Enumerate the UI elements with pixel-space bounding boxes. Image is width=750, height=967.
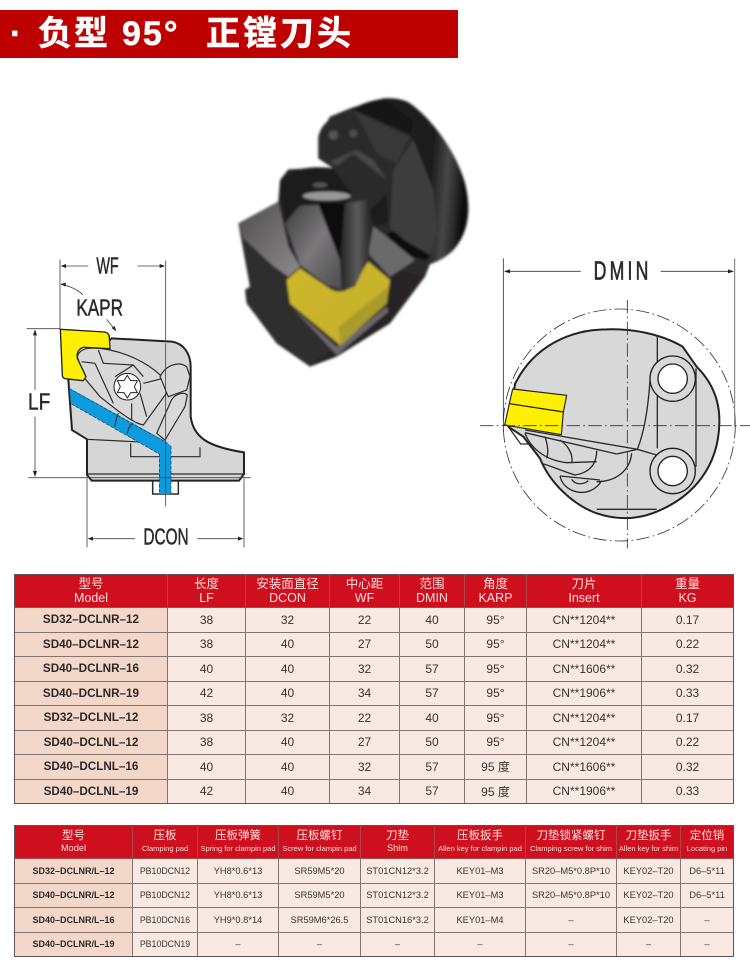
table header: SD40–DCLNL–16 (44, 760, 138, 773)
table header: CN**1906** (553, 686, 615, 700)
yellow insert (505, 389, 567, 435)
block top face (238, 202, 300, 277)
table header: ST01CN12*3.2 (366, 890, 429, 900)
table header: – (704, 915, 710, 925)
cylinder face (318, 108, 430, 277)
table header: PB10DCN12 (140, 866, 190, 876)
table header: – (646, 939, 651, 949)
holder body (68, 338, 244, 481)
table header: 95° (486, 662, 505, 676)
silhouette (238, 99, 468, 367)
table header: 95° (486, 735, 505, 749)
table header: Clamping pad (142, 844, 188, 853)
table header: YH8*0.6*13 (214, 890, 262, 900)
table header: 压板螺钉 (296, 830, 342, 842)
table header: ST01CN12*3.2 (366, 866, 429, 876)
table header: Spring for clampin pad (200, 844, 276, 853)
table header: KEY01–M3 (456, 866, 504, 876)
table header: 34 (358, 686, 371, 700)
product photo: boring head (238, 98, 468, 367)
table header: 0.32 (676, 662, 699, 676)
table header: Insert (568, 591, 600, 605)
table header: 中心距 (346, 577, 383, 591)
table header: 38 (200, 613, 213, 627)
table header: 0.33 (676, 686, 699, 700)
table header: 0.32 (676, 760, 699, 774)
table header: 57 (425, 784, 439, 798)
table header: SR59M5*20 (294, 866, 345, 876)
table header: 型号 (78, 577, 104, 591)
table header: SR59M5*20 (294, 890, 345, 900)
table header: 安装面直径 (256, 577, 319, 591)
table header: KEY02–T20 (623, 866, 674, 876)
table header: 57 (425, 662, 439, 676)
table header: 95° (486, 637, 505, 651)
table header: SD40–DCLNL–12 (44, 736, 138, 749)
title text: 95°: 95° (122, 15, 179, 53)
table header: SR59M6*26.5 (291, 915, 348, 925)
table header: PB10DCN19 (140, 939, 190, 949)
right diagram: front view (480, 256, 750, 548)
label: WF: WF (96, 252, 119, 278)
title text: 负型: 负型 (38, 15, 110, 53)
table header: 27 (358, 735, 371, 749)
table header: 27 (358, 637, 371, 651)
table header: 38 (200, 637, 213, 651)
table header: YH8*0.6*13 (214, 866, 262, 876)
bolt holes (650, 356, 695, 494)
title text: 正镗刀头: 正镗刀头 (206, 15, 354, 53)
table header (15, 575, 733, 803)
table header: KG (678, 591, 697, 605)
table header: 刀垫锁紧螺钉 (536, 830, 606, 842)
table header: PB10DCN16 (140, 915, 190, 925)
table header: KEY02–T20 (623, 915, 674, 925)
title banner (0, 10, 458, 58)
table header: YH9*0.8*14 (214, 915, 262, 925)
table header: 95 度 (481, 760, 510, 774)
table header: DMIN (416, 591, 448, 605)
table header: SR20–M5*0.8P*10 (532, 866, 610, 876)
table header: 40 (281, 760, 294, 774)
table header: 0.17 (676, 613, 699, 627)
table header: PB10DCN12 (140, 890, 190, 900)
table header: CN**1606** (553, 760, 615, 774)
dimension and centre lines (480, 258, 750, 548)
table header: 95° (486, 613, 505, 627)
yellow insert (60, 329, 110, 381)
table header: Model (74, 591, 108, 605)
table header: 40 (281, 637, 294, 651)
table header: Clamping screw for shim (530, 844, 612, 853)
table header: 型号 (62, 830, 85, 842)
clearance circle (503, 309, 735, 541)
table header: 34 (358, 784, 371, 798)
table header: SD40–DCLNR–16 (43, 662, 139, 675)
table header: WF (355, 591, 374, 605)
table header: 压板扳手 (457, 830, 503, 842)
insert support strip (292, 307, 388, 355)
dimension lines (27, 259, 251, 547)
table header: CN**1204** (553, 711, 615, 725)
table header: 压板 (154, 830, 176, 842)
cylinder side (383, 98, 468, 264)
table header: 42 (200, 686, 213, 700)
table header: SD40–DCLNR–12 (43, 638, 139, 651)
table header: 32 (281, 613, 294, 627)
table header: 0.17 (676, 711, 699, 725)
title bullet: · (10, 15, 21, 53)
table header: 40 (281, 735, 294, 749)
table header: 95 度 (481, 785, 510, 799)
table header: 刀片 (571, 577, 596, 591)
table header: – (568, 939, 574, 949)
table header: 32 (358, 760, 371, 774)
table header: 57 (425, 686, 439, 700)
table header: 57 (425, 760, 439, 774)
table header: 40 (200, 760, 213, 774)
table header: D6–5*11 (689, 866, 725, 876)
table header: Allen key for shim (619, 844, 678, 853)
table header: SD40–DCLNR–19 (43, 687, 139, 700)
table header: 40 (281, 784, 294, 798)
table header: 50 (425, 735, 439, 749)
table header: DCON (269, 591, 306, 605)
table header: 刀垫扳手 (626, 830, 672, 842)
table header: ST01CN16*3.2 (366, 915, 429, 925)
table header: SR20–M5*0.8P*10 (532, 890, 610, 900)
table header: Allen key for clampin pad (438, 844, 522, 853)
label: DCON: DCON (143, 524, 189, 550)
table header (15, 826, 733, 956)
block left side (242, 237, 333, 365)
table header: 50 (425, 637, 439, 651)
table header: 40 (200, 662, 213, 676)
table header: 角度 (483, 577, 508, 591)
table header: SD32–DCLNR/L–12 (32, 866, 115, 876)
spec table (14, 574, 734, 804)
left diagram: side view (27, 252, 251, 550)
label: LF: LF (28, 388, 50, 414)
table header: Model (61, 843, 86, 853)
table header: 32 (358, 662, 371, 676)
table header: – (477, 939, 483, 949)
table header: – (395, 939, 400, 949)
table header: Screw for clampin pad (282, 844, 357, 853)
table header: 40 (425, 613, 439, 627)
table header: 长度 (194, 577, 219, 591)
table header: KEY01–M3 (456, 890, 504, 900)
parts table (14, 825, 734, 957)
table header: LF (199, 591, 214, 605)
table header: CN**1204** (553, 613, 615, 627)
table header: SD40–DCLNR/L–19 (32, 939, 115, 949)
table header: KEY01–M4 (456, 915, 504, 925)
table header: 0.22 (676, 735, 699, 749)
table header: KEY02–T20 (623, 890, 674, 900)
table header: 38 (200, 711, 213, 725)
table header: 22 (358, 613, 371, 627)
table header: 重量 (675, 577, 700, 591)
table header: 22 (358, 711, 371, 725)
table header: 0.22 (676, 637, 699, 651)
table header: 40 (281, 686, 294, 700)
clamp (285, 205, 342, 290)
table header: SD32–DCLNL–12 (44, 711, 138, 724)
yellow insert (287, 262, 390, 345)
table header: – (704, 939, 710, 949)
screw (114, 373, 141, 400)
coolant channel (69, 388, 171, 494)
table header: 40 (281, 662, 294, 676)
table header: – (568, 915, 574, 925)
table header: 95° (486, 686, 505, 700)
table header: SD32–DCLNR–12 (43, 613, 139, 626)
table header: – (235, 939, 241, 949)
holder body (508, 329, 719, 518)
label: DMIN: DMIN (594, 256, 652, 285)
table header: 定位销 (690, 830, 724, 842)
table header: 压板弹簧 (215, 830, 261, 842)
table header: – (317, 939, 322, 949)
table header: 42 (200, 784, 213, 798)
table header: CN**1204** (553, 735, 615, 749)
table header: D6–5*11 (689, 890, 725, 900)
table header: SD40–DCLNL–19 (44, 785, 138, 798)
table header: CN**1906** (553, 784, 615, 798)
table header: 38 (200, 735, 213, 749)
table header: 0.33 (676, 784, 699, 798)
table header: CN**1204** (553, 637, 615, 651)
label: KAPR: KAPR (76, 294, 123, 320)
table header: Shim (387, 843, 408, 853)
table header: 刀垫 (386, 830, 409, 842)
table header: 范围 (419, 577, 444, 591)
table header: 40 (425, 711, 439, 725)
table header: 32 (281, 711, 294, 725)
table header: Locating pin (687, 844, 727, 853)
right ledge (368, 227, 415, 277)
table header: CN**1606** (553, 662, 615, 676)
table header: 95° (486, 711, 505, 725)
table header: SD40–DCLNR/L–16 (32, 915, 115, 925)
table header: SD40–DCLNR/L–12 (32, 890, 115, 900)
diagrams and photo (26, 96, 750, 550)
table header: KARP (478, 591, 513, 605)
